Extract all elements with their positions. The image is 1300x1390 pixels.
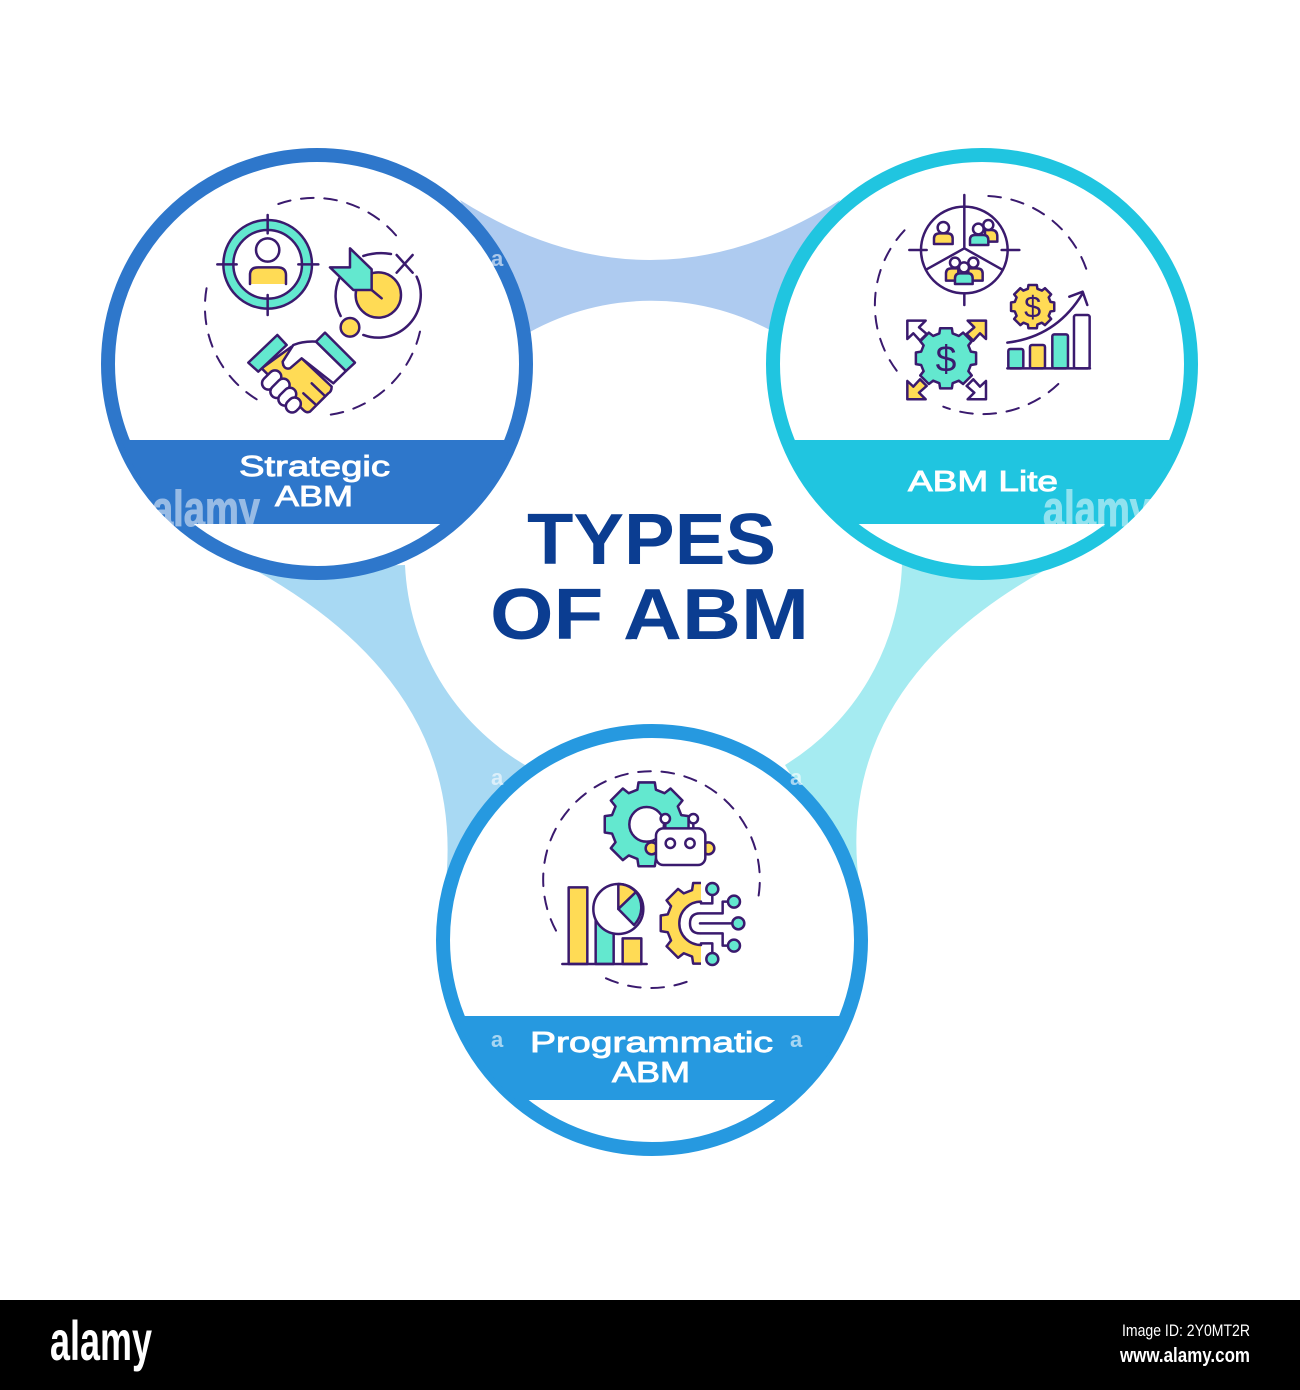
watermark: alamy — [1043, 481, 1151, 537]
connector: top — [460, 200, 840, 332]
icon: audience segments wheel — [909, 195, 1019, 305]
image id: Image ID: 2Y0MT2R — [1122, 1321, 1250, 1340]
label text: Programmatic — [530, 1027, 773, 1059]
icon: expanding budget gear: $ — [936, 338, 957, 380]
watermark marks: a — [491, 1027, 504, 1052]
title: TYPES — [527, 500, 776, 580]
icon: gear with robot — [605, 782, 714, 866]
label band — [130, 440, 504, 524]
circle ring — [443, 731, 861, 1149]
watermark marks: a — [790, 765, 803, 790]
dashed ring — [205, 198, 420, 415]
footer bar — [0, 1300, 1300, 1390]
icon: gear and rising bars — [1007, 285, 1090, 368]
label text line 2: ABM — [612, 1057, 690, 1089]
icon: expanding budget gear — [907, 321, 986, 399]
icon: half gear circuit — [661, 883, 744, 965]
title — [490, 500, 809, 655]
title: OF ABM — [490, 575, 809, 655]
connector: right — [785, 565, 1045, 890]
icon: handshake — [248, 333, 355, 415]
label text: Strategic — [239, 451, 390, 483]
icon group: segments, budget, growth — [875, 195, 1090, 414]
icon: bars and pie chart — [562, 884, 647, 964]
panel: Strategic ABM — [100, 155, 534, 573]
icon group: target and handshake — [205, 198, 421, 415]
label band — [794, 440, 1170, 524]
watermark marks: a — [790, 1027, 803, 1052]
circle ring — [108, 155, 526, 573]
panel: ABM Lite — [765, 155, 1199, 573]
icon: arrow on target — [330, 248, 421, 338]
icon: gear and rising bars: $ — [1024, 291, 1041, 325]
connector: left — [255, 565, 525, 890]
label text line 2: ABM — [275, 481, 353, 513]
footer logo: alamy — [50, 1309, 152, 1372]
watermark marks: a — [491, 765, 504, 790]
watermark: alamy — [152, 481, 260, 537]
panel: Programmatic ABM — [435, 731, 869, 1149]
icon: person in crosshair — [217, 215, 318, 315]
watermark over title: alamy — [625, 622, 711, 674]
watermark marks — [491, 246, 803, 1052]
label text: ABM Lite — [908, 466, 1058, 498]
footer url: www.alamy.com — [1119, 1345, 1250, 1367]
label band — [464, 1016, 840, 1100]
watermark marks: a — [491, 246, 504, 271]
dashed ring — [875, 196, 1087, 414]
icon group: automation and data — [543, 771, 760, 988]
dashed ring — [543, 771, 760, 988]
circle ring — [773, 155, 1191, 573]
